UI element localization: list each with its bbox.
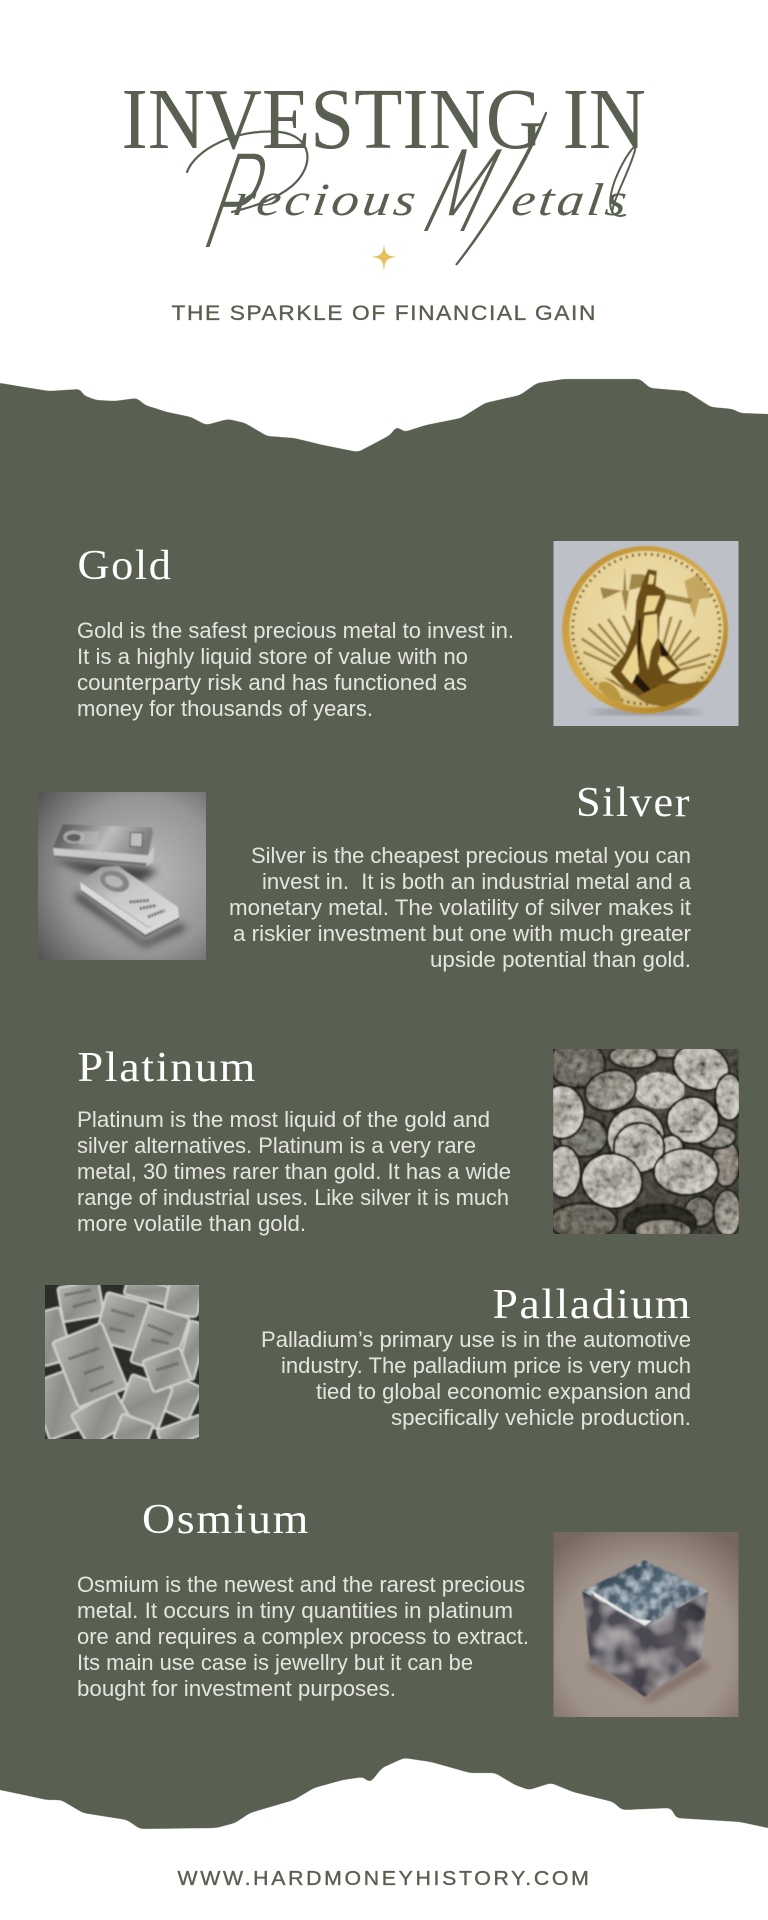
heading: silver: Silver xyxy=(576,780,691,826)
image: gold coin xyxy=(554,541,738,726)
text: gold description: It is a highly liquid store of value with no xyxy=(77,644,468,669)
text: osmium description: bought for investment purposes. xyxy=(77,1676,396,1701)
text: platinum description xyxy=(77,1107,511,1236)
text: silver description: monetary metal. The volatility of silver makes it xyxy=(229,895,692,920)
text: platinum description: silver alternatives. Platinum is a very rare xyxy=(77,1133,476,1158)
text: silver description: a riskier investment but one with much greater xyxy=(233,921,691,946)
text: platinum description: Platinum is the most liquid of the gold and xyxy=(77,1107,490,1132)
text: gold description xyxy=(77,618,514,721)
image: palladium bars xyxy=(45,1285,199,1439)
text: osmium description: ore and requires a complex process to extract. xyxy=(77,1624,529,1649)
panel: platinum xyxy=(77,1037,743,1243)
footer url: WWW.HARDMONEYHISTORY.COM xyxy=(178,1868,592,1890)
text: platinum description: more volatile than gold. xyxy=(77,1211,306,1236)
heading: gold: Gold xyxy=(78,543,172,589)
text: silver description: Silver is the cheapest precious metal you can xyxy=(251,843,691,868)
panel: palladium xyxy=(29,1276,692,1450)
text: platinum description: metal, 30 times rarer than gold. It has a wide xyxy=(77,1159,511,1184)
title script: Precious Metals: etals xyxy=(509,174,634,225)
text: palladium description xyxy=(261,1327,691,1430)
title script: Precious Metals xyxy=(185,113,635,278)
title script: Precious Metals: recious xyxy=(231,174,423,225)
text: palladium description: tied to global economic expansion and xyxy=(316,1379,691,1404)
text: palladium description: Palladium’s primary use is in the automotive xyxy=(261,1327,691,1352)
image: platinum coins xyxy=(553,1049,739,1234)
text: platinum description: range of industrial uses. Like silver it is much xyxy=(77,1185,509,1210)
heading: palladium: Palladium xyxy=(492,1282,692,1328)
heading: platinum: Platinum xyxy=(78,1045,257,1091)
panel: silver xyxy=(38,780,692,972)
panel: osmium xyxy=(77,1497,738,1717)
subtitle: THE SPARKLE OF FINANCIAL GAIN xyxy=(172,302,597,325)
text: silver description: invest in. It is both an industrial metal and a xyxy=(262,869,691,894)
text: gold description: money for thousands of years. xyxy=(77,696,373,721)
text: gold description: counterparty risk and has functioned as xyxy=(77,670,467,695)
image: silver bars xyxy=(38,792,206,960)
background band xyxy=(0,379,768,1834)
title script: Precious Metals: M xyxy=(399,128,524,258)
text: osmium description: Osmium is the newest and the rarest precious xyxy=(77,1572,525,1597)
text: osmium description: metal. It occurs in tiny quantities in platinum xyxy=(77,1598,513,1623)
text: silver description: upside potential than gold. xyxy=(430,947,691,972)
icon: gold sparkle xyxy=(371,244,397,271)
title: Investing In: INVESTING IN xyxy=(122,70,646,167)
title script: Precious Metals: P xyxy=(185,129,284,278)
text: silver description xyxy=(229,843,692,972)
heading: osmium: Osmium xyxy=(142,1497,310,1543)
text: osmium description xyxy=(77,1572,529,1701)
text: palladium description: specifically vehicle production. xyxy=(391,1405,691,1430)
text: gold description: Gold is the safest precious metal to invest in. xyxy=(77,618,514,643)
text: osmium description: Its main use case is jewellry but it can be xyxy=(77,1650,473,1675)
panel: gold xyxy=(77,538,738,726)
text: palladium description: industry. The palladium price is very much xyxy=(281,1353,691,1378)
image: osmium cube xyxy=(554,1532,738,1717)
